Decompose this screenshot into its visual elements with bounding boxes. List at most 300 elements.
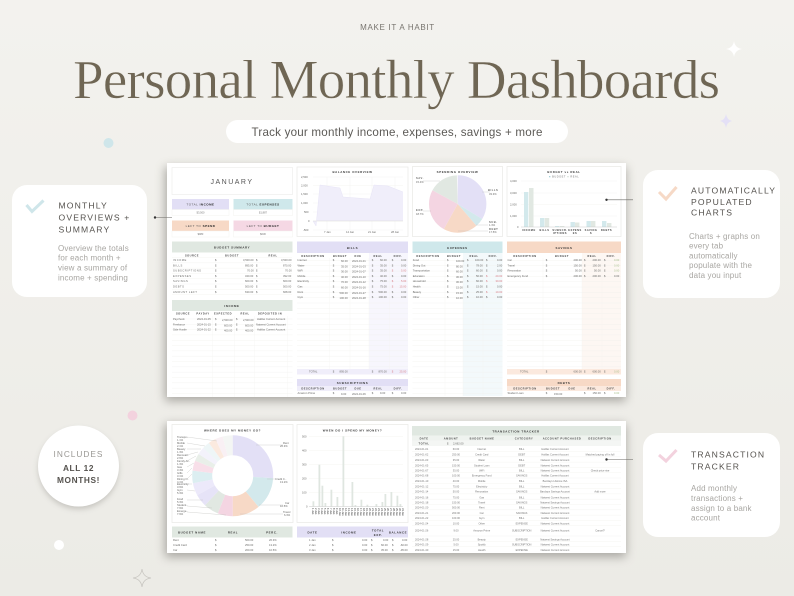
table: bills: REAL [373, 254, 383, 258]
table: budget name breakdown: 10.5% [269, 548, 277, 552]
chart: when do I spend my money: 25 Jan [383, 508, 387, 516]
table: transaction tracker: Spotify [478, 543, 486, 547]
chart: where does my money go donut: 7.9% [177, 506, 184, 510]
table: expenses: $ [447, 263, 449, 267]
table: income: 400.00 [224, 329, 233, 333]
subtitle eyebrow: MAKE IT A HABIT [360, 23, 435, 32]
table: bills: DUE [355, 254, 361, 258]
chart: balance overview: 7 Jan [324, 230, 331, 234]
chart: balance overview: 2,000 [301, 184, 308, 188]
callout card: monthly overviews: Overview the totals [58, 244, 129, 253]
table: savings: $ [604, 263, 606, 267]
KPI: left to spend [172, 220, 229, 237]
table: transaction tracker: Internet [477, 447, 486, 451]
table: budget summary: AMOUNT LEFT [173, 290, 197, 294]
table: transaction tracker: Natwest Savings Account [540, 537, 570, 541]
table: transaction tracker: SUBSCRIPTION [512, 543, 532, 547]
table: budget name breakdown [172, 526, 292, 552]
chart: where does my money go donut: 2.6% [177, 456, 184, 460]
table: daily balance: 0.00 [402, 538, 408, 542]
table: transaction tracker: BILL [519, 479, 525, 483]
table: debts: DUE [569, 387, 575, 391]
table: transaction tracker: EXPENSE [516, 548, 528, 552]
callout card: transaction tracker [643, 433, 780, 537]
table: transaction tracker: Natwest Current Account [541, 458, 570, 462]
table: expenses: 0.00 [497, 295, 503, 299]
KPI: left to budget [234, 220, 292, 237]
table: transaction tracker: Rent [479, 506, 485, 510]
table: savings: $ [604, 258, 606, 262]
table: transaction tracker: Cancel? [595, 529, 605, 533]
table: transaction tracker: 35.00 [453, 468, 460, 472]
chart: budget vs real: ■ BUDGET ■ REAL [549, 174, 579, 178]
table: transaction tracker: Natwest Current Account [541, 522, 570, 526]
chart: when do I spend my money: 17 Jan [359, 508, 363, 516]
table: bills: $ [372, 279, 374, 283]
table: transaction tracker: TRANSACTION TRACKER [492, 430, 540, 434]
table: expenses: $ [467, 263, 469, 267]
callout card: transaction tracker: account [691, 514, 721, 522]
table: budget name breakdown: BUDGET NAME [178, 530, 206, 534]
table: transaction tracker: Check price rise [591, 468, 610, 472]
table: daily balance: BALANCE [389, 530, 407, 534]
table: transaction tracker: BILL [519, 468, 525, 472]
table: transaction tracker: Halifax Current Account [541, 452, 569, 456]
table: transaction tracker: 2024-01-10 [415, 479, 429, 483]
table: debts: $ [604, 391, 606, 395]
chart: budget vs real: INCOME [522, 228, 536, 232]
chart: when do I spend my money: 31 Jan [401, 508, 405, 516]
table: expenses: DIFF. [489, 254, 497, 258]
badge: includes all 12 months: MONTHS! [57, 475, 100, 485]
table: budget summary: DEBTS [173, 284, 184, 288]
chart: where does my money go donut: Family Ac.. [177, 459, 190, 463]
table: expenses: $ [486, 284, 488, 288]
table: transaction tracker: SAVINGS [516, 490, 528, 494]
table: budget summary: $ [215, 269, 217, 273]
chart: where does my money go donut: Food [177, 497, 184, 501]
table: bills: Water [298, 263, 305, 267]
arrow: monthly overview pointer [154, 216, 172, 219]
chart: when do I spend my money: 28 Jan [392, 508, 396, 516]
table: daily balance: 35.00 [381, 548, 388, 552]
table: bills: $ [392, 284, 394, 288]
chart: balance overview: 21 Jan [368, 230, 377, 234]
table: income: 600.00 [245, 323, 254, 327]
table: bills: $ [333, 279, 335, 283]
table: income: INCOME [224, 304, 240, 308]
chart: where does my money go donut: Beauty [177, 447, 186, 451]
table: transaction tracker: Barclays Savings Account [540, 490, 570, 494]
chart: budget vs real: EXPENS [568, 228, 582, 232]
table: transaction tracker: Gym [479, 516, 484, 520]
table: savings: TOTAL [520, 370, 529, 374]
table: savings: REAL [587, 254, 597, 258]
KPI: left to spend: $983 [198, 232, 204, 236]
table: expenses: $ [486, 295, 488, 299]
table: transaction tracker: 2024-01-29 [415, 543, 429, 547]
table: expenses: $ [467, 274, 469, 278]
table: transaction tracker: Mobile [478, 479, 486, 483]
table: bills: 0.00 [401, 274, 407, 278]
chart: when do I spend my money: 15 Jan [353, 508, 357, 516]
decorative dot: white [54, 540, 64, 550]
chart: balance overview: 1,000 [301, 201, 308, 205]
table: transaction tracker: Car [480, 511, 484, 515]
table: debts: DEBTS [558, 381, 570, 385]
chart: where does my money go donut: WHERE DOES MY MONEY GO? [204, 428, 261, 432]
chart: budget vs real: 3,000 [510, 191, 517, 195]
table: bills: 100.00 [340, 296, 348, 300]
table: budget summary: 870.00 [283, 263, 292, 267]
table: expenses: Dining Out [413, 263, 426, 267]
table: bills: 2024-01-28 [352, 296, 366, 300]
table: expenses: $ [486, 258, 488, 262]
table: budget summary: EXPENSES [173, 274, 192, 278]
table: transaction tracker: 2024-01-28 [415, 537, 429, 541]
chart: budget vs real: SAVING [585, 228, 597, 232]
table: savings: 0.00 [614, 263, 620, 267]
callout card: automatically populated charts: populate with the [689, 261, 752, 270]
chart: where does my money go donut: Rent [283, 441, 289, 445]
table: savings: 150.00 [574, 263, 582, 267]
table: bills: 35.00 [341, 264, 348, 268]
table: transaction tracker: Natwest Current Account [541, 548, 570, 552]
callout card: monthly overviews: view a summary of [58, 264, 128, 272]
table: daily balance: $ [371, 543, 373, 547]
table: bills: $ [372, 258, 374, 262]
table: bills: 2024-01-07 [352, 270, 366, 274]
table: savings: $ [584, 370, 586, 374]
table: savings: $ [584, 258, 586, 262]
table: income: 2024-01-05 [197, 317, 211, 321]
table: transaction tracker: Natwest Current Account [541, 543, 570, 547]
table: savings: $ [584, 263, 586, 267]
table: daily balance: INCOME [341, 530, 357, 534]
table: expenses: $ [467, 269, 469, 273]
chart: when do I spend my money: 0 [306, 504, 308, 508]
table: bills: 60.00 [380, 258, 387, 262]
table: savings: SAVINGS [556, 246, 572, 250]
table: bills: 0.00 [401, 295, 407, 299]
chart: spending overview pie: 1.3% [489, 223, 496, 227]
table: expenses: Food [413, 258, 419, 262]
table: bills: $ [372, 274, 374, 278]
chart: when do I spend my money: 1 Jan [311, 508, 315, 515]
table: budget summary: 895.00 [245, 263, 254, 267]
chart: where does my money go donut [172, 424, 293, 522]
callout card: monthly overviews: OVERVIEWS + [58, 212, 130, 222]
table: expenses: $ [467, 295, 469, 299]
table: bills: 75.00 [380, 279, 387, 283]
table: income: 2,500.00 [222, 318, 233, 322]
chart: when do I spend my money: 2 Jan [314, 508, 318, 515]
table: expenses: Health [413, 284, 421, 288]
badge: includes all 12 months: ALL 12 [63, 463, 94, 473]
chart: when do I spend my money: 14 Jan [350, 508, 354, 516]
table: savings: 0.00 [614, 258, 620, 262]
table: transaction tracker: BILL [519, 506, 525, 510]
table: expenses: Transportation [413, 269, 430, 273]
table: subscriptions: $ [392, 391, 394, 395]
table: transaction tracker: DEBT [518, 463, 526, 467]
table: budget summary: 392.00 [283, 274, 292, 278]
table: bills: $ [333, 269, 335, 273]
table: transaction tracker: Water [478, 458, 485, 462]
table: budget summary: $ [215, 263, 217, 267]
table: budget name breakdown: 200.00 [245, 548, 254, 552]
table: daily balance: 0.00 [362, 538, 368, 542]
callout card: monthly overviews: SUMMARY [58, 224, 110, 234]
table: bills: 2024-01-10 [352, 275, 366, 279]
KPI: total income: TOTAL INCOME [186, 202, 215, 206]
table: expenses [412, 242, 503, 396]
chart: balance overview: 500 [304, 210, 309, 214]
table: bills: 35.00 [380, 263, 387, 267]
table: subscriptions: SUBSCRIPTIONS [337, 381, 368, 385]
callout card: monthly overviews: MONTHLY [58, 200, 108, 210]
table: expenses: 80.00 [456, 264, 463, 268]
table: expenses: $ [486, 269, 488, 273]
table: budget name breakdown: $ [215, 538, 217, 542]
table: transaction tracker: 35.00 [453, 458, 460, 462]
table: income: 2024-01-15 [197, 322, 211, 326]
chart: where does my money go donut: Mobile [177, 441, 185, 445]
table: transaction tracker: 2024-01-02 [415, 452, 429, 456]
chart: spending overview pie: 33.3% [489, 192, 497, 196]
table: expenses: 10.00 [496, 290, 503, 294]
table: transaction tracker: 2024-01-07 [415, 468, 429, 472]
KPI: total income [172, 199, 229, 216]
callout card: automatically populated charts: Charts + graphs on [689, 232, 760, 241]
table: transaction tracker: 10.00 [453, 522, 460, 526]
table: income: DEPOSITED IN [258, 312, 282, 316]
table: transaction tracker: 250.00 [452, 452, 461, 456]
table: savings: DESCRIPTION [513, 254, 537, 258]
table: savings: Travel [508, 263, 515, 267]
callout card: automatically populated charts: data you input [689, 271, 742, 280]
chart: where does my money go donut: Gym [177, 488, 183, 492]
chart: where does my money go donut: Travel [283, 510, 291, 514]
chart: balance overview: 28 Jan [391, 230, 400, 234]
chart: when do I spend my money: 22 Jan [374, 508, 378, 516]
chart: balance overview: -500 [303, 228, 309, 232]
chart: balance overview: 14 Jan [346, 230, 355, 234]
table: budget summary: 500.00 [283, 284, 292, 288]
table: bills: Electricity [298, 279, 310, 283]
table: expenses: Education [413, 274, 425, 278]
chart: where does my money go donut: Credit C.. [275, 477, 287, 481]
table: income: 2,500.00 [243, 318, 254, 322]
table: expenses: $ [447, 279, 449, 283]
table: daily balance: -95.00 [400, 548, 408, 552]
table: transaction tracker: TOTAL [419, 442, 429, 446]
table: daily balance: $ [371, 548, 373, 552]
table: budget summary: INCOME [173, 258, 187, 262]
table: budget name breakdown: Car [173, 548, 177, 552]
chart: where does my money go donut: 2.1% [177, 444, 184, 448]
KPI: total income: $3,500 [197, 210, 205, 214]
table: bills: 2024-01-16 [352, 286, 366, 290]
table: savings: 200.00 [574, 274, 582, 278]
table: transaction tracker: 2,662.00 [453, 442, 464, 446]
table: expenses: 20.00 [496, 274, 503, 278]
table: bills: $ [392, 290, 394, 294]
callout card: automatically populated charts: POPULATED [691, 197, 753, 207]
table: income: EXPECTED [214, 312, 232, 316]
table: debts: BUDGET [546, 387, 560, 391]
table: transaction tracker: Natwest Current Account [541, 511, 570, 515]
chart: budget vs real: BUDGET vs REAL [547, 170, 581, 174]
table: income: $ [215, 328, 217, 332]
table: savings: Car [508, 258, 512, 262]
table: bills: 25.00 [400, 370, 407, 374]
table: expenses: $ [447, 258, 449, 262]
table: income: $ [215, 317, 217, 321]
table: expenses: $ [467, 290, 469, 294]
table: transaction tracker [412, 426, 621, 552]
table: budget summary: $ [215, 274, 217, 278]
table: daily balance: $ [392, 538, 394, 542]
table: expenses: Beauty [413, 290, 422, 294]
table: transaction tracker: 15.00 [453, 548, 460, 552]
table: savings: 200.00 [574, 258, 582, 262]
table: savings: 200.00 [592, 258, 601, 262]
chart: when do I spend my money: 4 Jan [320, 508, 324, 515]
table: expenses: 10.00 [476, 295, 483, 299]
table: expenses: $ [447, 269, 449, 273]
table: transaction tracker: BILL [519, 516, 525, 520]
table: transaction tracker: 2024-01-26 [415, 529, 429, 533]
chart: balance overview: BALANCE OVERVIEW [332, 170, 373, 174]
table: bills: 0.00 [401, 290, 407, 294]
table: budget summary [172, 242, 292, 295]
callout card: transaction tracker: TRACKER [691, 462, 740, 472]
table: savings [507, 242, 621, 374]
chart: budget vs real: DEBTS [601, 228, 612, 232]
table: savings: 0.00 [614, 274, 620, 278]
table: bills: $ [372, 370, 374, 374]
table: expenses: 30.00 [456, 280, 463, 284]
table: income: 2024-01-22 [197, 328, 211, 332]
KPI: left to spend: LEFT TO SPEND [186, 224, 216, 228]
table: subscriptions: DUE [355, 387, 361, 391]
chart: budget vs real: 0 [517, 225, 519, 229]
table: transaction tracker: SUBSCRIPTION [512, 529, 532, 533]
KPI: total expenses [234, 199, 292, 216]
table: transaction tracker: CATEGORY [515, 436, 533, 440]
chart: where does my money go donut: Transpo.. [177, 435, 189, 439]
table: transaction tracker: Credit Card [475, 452, 489, 456]
table: transaction tracker: Add more [594, 490, 606, 494]
chart: where does my money go donut: Renovati.. [177, 453, 189, 457]
chart: balance overview: 0 [308, 219, 310, 223]
table: expenses: 15.00 [456, 286, 463, 290]
chart: budget vs real: IPTIONS [553, 231, 567, 235]
chart: when do I spend my money: WHEN DO I SPEND MY MONEY? [323, 428, 382, 432]
chart: budget vs real: BILLS [540, 228, 550, 232]
table: expenses: $ [467, 284, 469, 288]
table: income: Halifax Current Account [257, 328, 285, 332]
table: bills: $ [372, 295, 374, 299]
table: bills: $ [333, 290, 335, 294]
table: bills: $ [392, 295, 394, 299]
table: savings: $ [584, 274, 586, 278]
table: subscriptions: 9.00 [380, 391, 386, 395]
table: transaction tracker: BUDGET NAME [470, 436, 494, 440]
table: transaction tracker: Gas [479, 495, 485, 499]
table: expenses: 60.00 [476, 279, 483, 283]
table: transaction tracker: 2024-01-24 [415, 522, 429, 526]
table: savings: Emergency Fund [508, 274, 528, 278]
table: transaction tracker: EXPENSE [516, 522, 528, 526]
chart: when do I spend my money: 8 Jan [332, 508, 336, 515]
table: expenses: $ [467, 279, 469, 283]
table: debts: DIFF. [607, 387, 615, 391]
table: income: Paycheck [173, 317, 185, 321]
chart: budget vs real: 2,000 [510, 202, 517, 206]
table: bills: 2024-01-12 [352, 280, 366, 284]
callout card: automatically populated charts: every tab [689, 242, 724, 250]
table: budget summary: BUDGET SUMMARY [214, 246, 250, 250]
chart: spending overview pie: SAV. [416, 176, 424, 180]
table: budget summary: BILLS [173, 263, 183, 267]
table: bills: $ [372, 290, 374, 294]
table: daily balance: $ [332, 543, 334, 547]
arrow: charts pointer [605, 199, 633, 201]
table: debts: REAL [587, 387, 597, 391]
table: savings: BUDGET [555, 254, 569, 258]
table: budget summary: $ [256, 269, 258, 273]
table: transaction tracker: 150.00 [452, 501, 461, 505]
table: daily balance: EXP. [374, 533, 382, 537]
table: expenses: 50.00 [476, 274, 483, 278]
table: transaction tracker: 2024-01-16 [415, 495, 429, 499]
table: transaction tracker: DATE [420, 436, 428, 440]
table: bills: $ [333, 370, 335, 374]
table: transaction tracker: 100.00 [452, 516, 461, 520]
table: transaction tracker: Electricity [476, 484, 488, 488]
table: budget summary: $ [256, 284, 258, 288]
table: income: $ [236, 322, 238, 326]
chart: spending overview pie: SUB. [489, 220, 497, 224]
table: budget summary: 500.00 [245, 284, 254, 288]
table: bills: $ [372, 284, 374, 288]
table: daily balance: 1 Jan [309, 538, 316, 542]
KPI: left to budget: LEFT TO BUDGET [247, 224, 279, 228]
table: income: SOURCE [176, 312, 190, 316]
subtitle pill: Track your monthly income, expenses, savings + more [252, 126, 542, 139]
chart: budget vs real: 1,000 [510, 214, 517, 218]
table: savings: $ [604, 370, 606, 374]
callout card: transaction tracker: transactions + [691, 494, 743, 503]
table: bills: Internet [298, 258, 307, 262]
chart: budget vs real [507, 166, 621, 236]
table: bills: TOTAL [309, 370, 318, 374]
table: budget summary: SUBSCRIPTIONS [173, 269, 201, 273]
table: bills: 500.00 [340, 291, 348, 295]
table: budget name breakdown: 250.00 [245, 543, 254, 547]
chart: where does my money go donut: 1.1% [177, 438, 184, 442]
table: transaction tracker: Natwest Current Account [541, 484, 570, 488]
table: bills: 2024-01-01 [352, 259, 366, 263]
table: income: Halifax Current Account [257, 317, 285, 321]
chart: spending overview pie: 18.7% [416, 212, 424, 216]
chart: where does my money go donut: Student.. [177, 503, 188, 507]
table: bills: $ [333, 274, 335, 278]
table: income: 600.00 [224, 323, 233, 327]
table: transaction tracker: Travel [478, 501, 486, 505]
